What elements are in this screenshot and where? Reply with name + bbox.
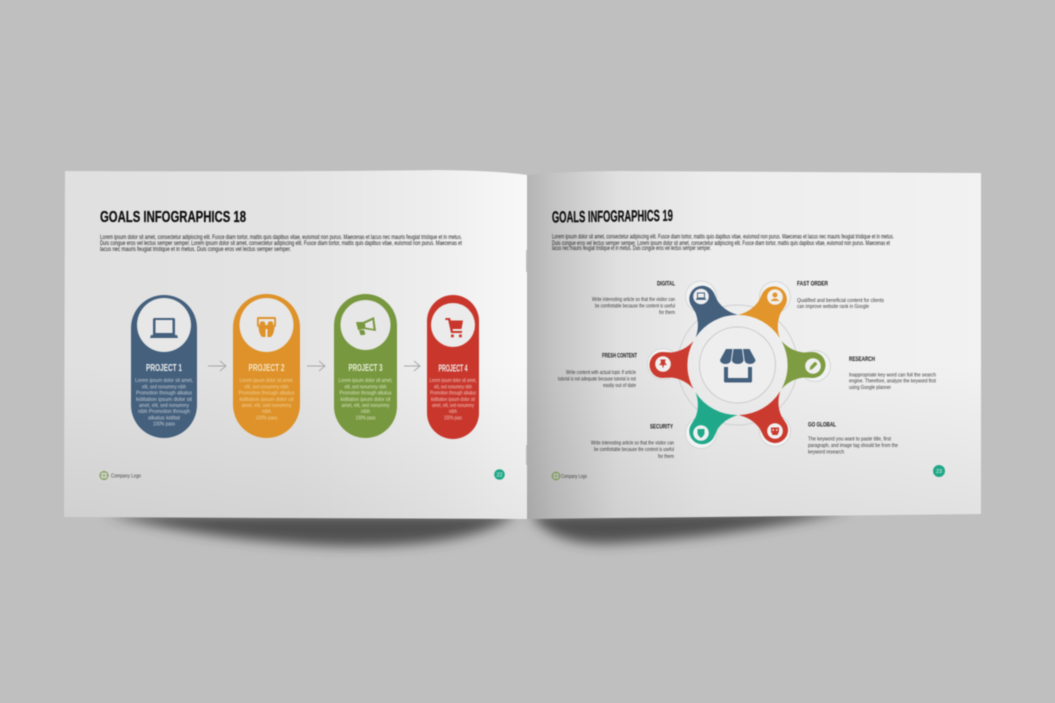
label: digital bbox=[592, 280, 675, 316]
icon: go global badge bbox=[767, 423, 783, 439]
label: fast order: Qualified and beneficial content for clients bbox=[797, 298, 884, 304]
panel: project 3: nibh bbox=[361, 409, 370, 415]
panel: project 2: 100% pass bbox=[256, 416, 278, 422]
icon: fresh content pin bbox=[655, 356, 671, 372]
icon: digital laptop bbox=[693, 289, 709, 304]
panel: project 1: amet, elit, sed nonummy bbox=[139, 403, 189, 409]
heading: goals infographics 19: GOALS INFOGRAPHICS 19 bbox=[552, 208, 673, 226]
panel: project 1: Lorem ipsum dolor sit amet, bbox=[135, 378, 193, 384]
panel: project 2: elit, sed nonummy nibh bbox=[244, 384, 288, 390]
panel: project 1: 100% pass bbox=[153, 422, 175, 428]
label: security bbox=[591, 424, 674, 460]
label: research: using Google planner bbox=[849, 385, 891, 391]
panel: project 4: elit, sed nonummy nibh bbox=[434, 384, 472, 390]
panel: project 2 bbox=[233, 294, 300, 438]
panel: project 1 bbox=[131, 295, 197, 438]
petal: go global bbox=[739, 391, 802, 453]
chart: radial goals diagram bbox=[648, 276, 830, 454]
panel: project 1: Promotion through alkalus bbox=[136, 390, 192, 396]
panel: project 3: Promotion through alkalus bbox=[340, 390, 392, 396]
panel: project 1: nibh Promotion through bbox=[138, 409, 190, 415]
panel: project 4: Promotion through alkalus bbox=[430, 390, 476, 396]
icon: research pencil bbox=[805, 358, 821, 374]
icon: storefront bbox=[720, 349, 756, 382]
panel: project 4: nibh bbox=[449, 409, 457, 415]
label: fresh content: tutorial is not adequate because tutorial is not bbox=[558, 376, 636, 382]
right page footer logo: Company Logo bbox=[561, 474, 587, 480]
petal: research bbox=[782, 341, 826, 389]
label: research: engine. Therefore, analyze the keyword first bbox=[849, 378, 936, 384]
panel: project 2: kiditation ipsum dolor sit bbox=[240, 397, 294, 403]
heading: goals infographics 18: GOALS INFOGRAPHICS 18 bbox=[100, 209, 246, 226]
arrow: project 1 to 2 bbox=[208, 361, 226, 371]
spine marks bbox=[526, 250, 528, 465]
petal: fresh content bbox=[650, 341, 694, 389]
label: security: SECURITY bbox=[650, 424, 674, 430]
right page footer logo bbox=[552, 472, 587, 480]
icon: megaphone bbox=[356, 317, 376, 335]
label: fast order: can improve website rank in Google bbox=[797, 304, 869, 310]
label: digital: for them bbox=[659, 310, 675, 316]
label: research bbox=[849, 356, 936, 391]
icon: shopping cart bbox=[445, 318, 463, 337]
petal: security bbox=[675, 393, 738, 454]
label: security: Write interesting article so that the visitor can bbox=[591, 440, 674, 446]
petal: fast order bbox=[738, 276, 801, 338]
panel: project 2: PROJECT 2 bbox=[248, 363, 285, 374]
label: fresh content: Write content with actual topic If article bbox=[566, 370, 636, 376]
petal: digital bbox=[675, 276, 738, 337]
panel: project 3: amet, elit, sed nonummy bbox=[342, 403, 390, 409]
left page footer logo: Company Logo bbox=[111, 474, 141, 480]
intro text: left page: Duis congue eros vel lectus semper semper. Lorem ipsum dolor sit amet, consectetur adipiscing elit. Fusce diam tortor, mattis quis dapibus vitae, euismod non purus. Maecenas et bbox=[100, 241, 462, 247]
label: go global: GO GLOBAL bbox=[808, 422, 836, 428]
label: go global: paragraph, and image tag should be from the bbox=[808, 443, 898, 449]
label: go global: keyword research bbox=[808, 450, 844, 456]
label: fresh content: easily out of date bbox=[603, 383, 636, 389]
intro text: right page: Duis congue eros vel lectus semper semper. Lorem ipsum dolor sit amet, consectetur adipiscing elit. Fusce diam tortor, mattis quis dapibus vitae, euismod non purus. Maecenas et bbox=[552, 241, 890, 247]
panel: project 3 bbox=[334, 294, 397, 438]
node rings bbox=[648, 281, 830, 448]
label: go global: The keyword you want to paste title, first bbox=[808, 436, 891, 442]
label: research: RESEARCH bbox=[849, 356, 875, 363]
intro text: left page bbox=[100, 235, 462, 253]
label: security: for them bbox=[658, 454, 674, 460]
panel: project 2: amet, elit, sed nonummy bbox=[242, 403, 292, 409]
panel: project 1: alkalus kiditat bbox=[148, 416, 180, 422]
label: fresh content: FRESH CONTENT bbox=[602, 352, 637, 360]
intro text: left page: lacus nec mauris feugiat tristique et in metus. Duis congue eros vel lectus semper semper. bbox=[100, 247, 291, 253]
icon: laptop bbox=[150, 318, 178, 338]
intro text: right page: Lorem ipsum dolor sit amet, consectetur adipiscing elit. Fusce diam tortor, mattis quis dapibus vitae, euismod non purus. Maecenas et lacus nec mauris feugiat tristique et in metus. bbox=[552, 234, 894, 240]
label: digital: Write interesting article so that the visitor can bbox=[592, 297, 675, 303]
label: fresh content bbox=[558, 352, 637, 389]
book shadow bbox=[105, 510, 850, 546]
panel: project 3: 100% pass bbox=[356, 416, 376, 422]
arrow: project 2 to 3 bbox=[307, 361, 325, 371]
panel: project 3: Lorem ipsum dolor sit amet, bbox=[338, 378, 393, 384]
page number 22 bbox=[494, 469, 505, 480]
icon: fast order user bbox=[767, 289, 783, 305]
intro text: right page: lacus nec mauris feugiat tristique et in metus. Duis congue eros vel lectus semper semper. bbox=[552, 246, 711, 252]
panel: project 4: kiditation ipsum dolor sit bbox=[431, 397, 475, 403]
right page bbox=[527, 171, 981, 519]
panel: project 3: PROJECT 3 bbox=[348, 363, 383, 374]
label: research: Inappropriate key word can foil the search bbox=[849, 372, 936, 378]
label: digital: be comfortable because the content is useful bbox=[595, 304, 675, 310]
panel: project 4: Lorem ipsum dolor sit amet, bbox=[430, 378, 477, 384]
icon: slideshare bbox=[257, 317, 276, 337]
label: digital: DIGITAL bbox=[657, 280, 675, 288]
panel: project 2: Lorem ipsum dolor sit amet, bbox=[240, 378, 294, 384]
arrow: project 3 to 4 bbox=[404, 361, 420, 371]
panel: project 2: nibh bbox=[262, 409, 271, 415]
page number 23 bbox=[933, 465, 945, 477]
panel: project 2: Promotion through alkalus bbox=[238, 390, 295, 396]
panel: project 1: PROJECT 1 bbox=[146, 363, 182, 374]
panel: project 4: PROJECT 4 bbox=[438, 364, 468, 374]
panel: project 4: 100% pass bbox=[444, 416, 462, 422]
panel: project 4 bbox=[427, 295, 479, 439]
panel: project 3: kiditation ipsum dolor sit bbox=[340, 397, 391, 403]
label: security: be comfortable because the content is useful bbox=[594, 447, 674, 453]
left page bbox=[64, 170, 527, 519]
label: fast order bbox=[797, 280, 884, 310]
panel: project 1: kiditation ipsum dolor sit bbox=[136, 397, 192, 403]
page bottom shading bbox=[64, 171, 981, 519]
panel: project 4: amet, elit, sed nonummy bbox=[432, 403, 474, 409]
left page footer logo bbox=[100, 472, 141, 480]
intro text: left page: Lorem ipsum dolor sit amet, consectetur adipiscing elit. Fusce diam tortor, mattis quis dapibus vitae, euismod non purus. Maecenas et lacus nec mauris feugiat tristique et in metus. bbox=[100, 235, 462, 241]
panel: project 3: elit, sed nonummy nibh bbox=[344, 384, 386, 390]
label: go global bbox=[808, 422, 898, 456]
label: fast order: FAST ORDER bbox=[797, 280, 828, 288]
page number 22: 22 bbox=[496, 472, 503, 478]
icon: security shield bbox=[693, 425, 709, 441]
intro text: right page bbox=[552, 234, 894, 252]
page number 23: 23 bbox=[936, 469, 942, 475]
panel: project 1: elit, sed nonummy nibh bbox=[142, 384, 186, 390]
